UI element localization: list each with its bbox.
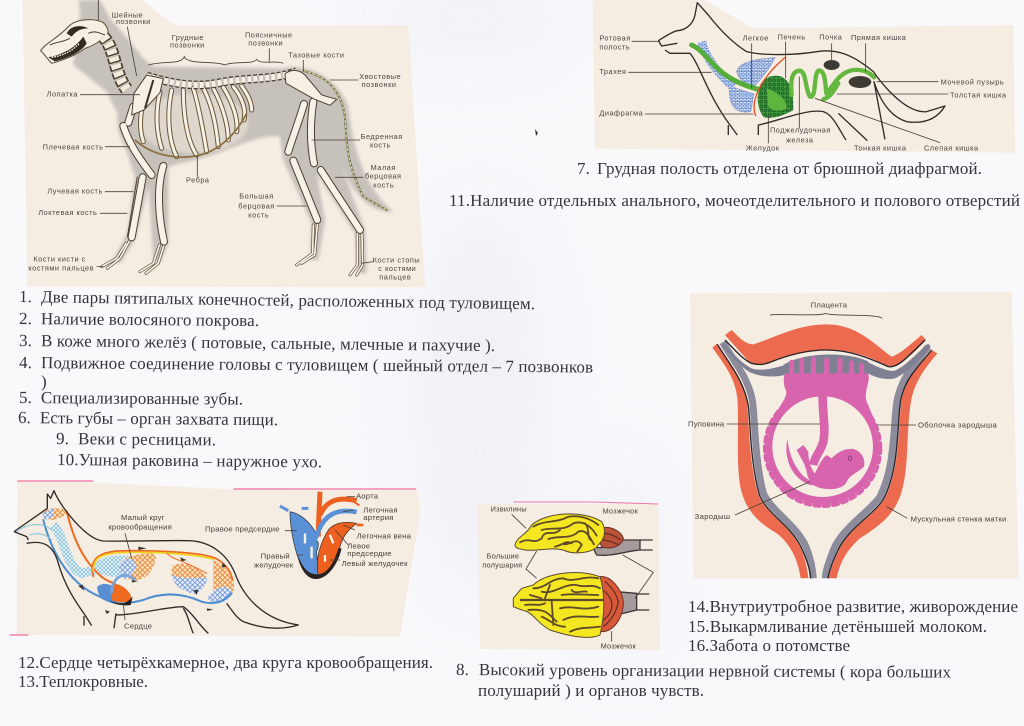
skeleton labels: Малая	[371, 163, 396, 172]
panel: digestive and respiratory system	[593, 0, 1015, 153]
clipping paper	[17, 482, 421, 637]
skeleton labels: кость	[370, 140, 391, 149]
circulation labels: Легочная	[363, 506, 398, 515]
blood vessels	[17, 512, 233, 603]
umbilical cord and embryo	[786, 395, 864, 489]
circulation labels: Левый желудочек	[342, 559, 408, 568]
speck	[535, 129, 538, 136]
text: points 1 to 6, 9, 10: 6. Есть губы – орган захвата пищи.	[18, 408, 278, 429]
digestive labels	[599, 32, 1007, 153]
panel: embryo in uterus	[688, 292, 1019, 578]
digestive labels: Печень	[778, 32, 806, 41]
skeleton labels: Лучевая кость	[47, 186, 103, 195]
leader lines	[80, 0, 373, 267]
brain labels: Мозжечок	[603, 506, 638, 515]
skeleton labels	[28, 10, 420, 281]
uterus muscle wall	[712, 324, 937, 578]
digestive tract	[692, 45, 874, 118]
embryo labels: Мускульная стенка матки	[911, 515, 1006, 524]
lungs	[729, 58, 775, 112]
body shadow	[73, 0, 393, 273]
digestive labels: Прямая кишка	[851, 33, 907, 42]
skeleton bones	[102, 37, 387, 275]
text: points 1 to 6, 9, 10: 9. Веки с ресницами.	[56, 429, 216, 449]
brain side view	[515, 514, 605, 553]
skeleton labels: позвонки	[362, 80, 396, 89]
cerebellum	[597, 527, 623, 632]
circulation labels: желудочек	[254, 560, 294, 569]
skeleton labels: берцовая	[365, 171, 402, 180]
neck capillary lattice	[53, 525, 95, 573]
leader lines	[628, 41, 948, 143]
clipping paper	[23, 0, 425, 287]
text: points 1 to 6, 9, 10: 10.Ушная раковина – наружное ухо.	[57, 450, 322, 471]
skeleton labels: позвонки	[170, 40, 205, 49]
skeleton labels: позвонки	[248, 38, 283, 47]
skeleton labels: Тазовые кости	[288, 50, 344, 59]
text: points 1 to 6, 9, 10	[18, 287, 593, 471]
digestive labels: железа	[786, 136, 814, 145]
circulation labels: предсердие	[347, 549, 392, 558]
digestive labels: Желудок	[746, 144, 780, 153]
brain labels: Извилины	[491, 505, 527, 514]
heart in body	[97, 575, 135, 605]
skeleton labels: кость	[248, 211, 269, 220]
digestive labels: Почка	[819, 32, 843, 41]
circulation labels: Правое предсердие	[205, 525, 280, 534]
skeleton labels: Кости стопы	[373, 255, 420, 264]
circulation labels: кровообращения	[108, 522, 172, 531]
skeleton labels: Локтевая кость	[38, 208, 97, 217]
skeleton labels: Шейные	[112, 10, 143, 19]
circulation labels: артерия	[363, 513, 394, 522]
skeleton labels: Грудные	[172, 33, 204, 42]
brain labels: Большие	[487, 551, 519, 560]
black wall lines	[717, 340, 932, 578]
text: points 7 and 11: 11.Наличие отдельных анального, мочеотделительного и полового отверстий	[449, 191, 1020, 210]
digestive labels: Толстая кишка	[950, 90, 1007, 99]
skeleton labels: позвонки	[116, 17, 151, 26]
skeleton labels: пальцев	[379, 272, 411, 281]
text: points 14 to 16	[688, 597, 1018, 655]
text: points 1 to 6, 9, 10: 3. В коже много желёз ( потовые, сальные, млечные и пахучие ).	[19, 331, 495, 355]
digestive labels: полость	[599, 42, 630, 51]
uterus grey lining	[723, 342, 928, 578]
leader lines	[512, 514, 653, 642]
clipping paper	[690, 292, 1019, 578]
digestive labels: Мочевой пузырь	[941, 78, 1004, 87]
text: points 14 to 16: 14.Внутриутробное развитие, живорождение	[688, 597, 1018, 616]
text: point 8: полушарий ) и органов чувств.	[478, 681, 704, 700]
brain labels: полушария	[482, 560, 522, 569]
skeleton labels: кость	[373, 180, 394, 189]
panel: dog skeleton	[23, 0, 425, 287]
text: points 7 and 11: 7. Грудная полость отделена от брюшной диафрагмой.	[577, 159, 982, 178]
skeleton labels: Хвостовые	[359, 72, 401, 81]
skeleton labels: Ребра	[186, 176, 210, 185]
skull	[41, 20, 108, 63]
clipping paper	[478, 504, 660, 650]
text: points 1 to 6, 9, 10: 1. Две пары пятипалых конечностей, расположенных под туловищем.	[19, 287, 535, 313]
digestive labels: Диафрагма	[599, 108, 644, 117]
embryo labels	[688, 300, 1006, 524]
skeleton labels: берцовая	[238, 201, 275, 210]
text: point 8: 8. Высокий уровень организации нервной системы ( кора больших	[456, 660, 952, 682]
fox outline	[14, 491, 298, 633]
pink paper edge	[513, 502, 658, 504]
circulation labels: Сердце	[124, 621, 152, 630]
skeleton labels: Кости кисти с	[33, 255, 86, 264]
skeleton labels: Поясничные	[245, 30, 293, 39]
digestive labels: Трахея	[599, 67, 626, 76]
text: points 1 to 6, 9, 10: 5. Специализированные зубы.	[19, 388, 243, 409]
pink paper edges	[10, 481, 416, 635]
text: points 12 and 13: 12.Сердце четырёхкамерное, два круга кровообращения.	[18, 653, 433, 672]
text: points 14 to 16: 15.Выкармливание детёнышей молоком.	[688, 617, 987, 636]
diaphragm	[754, 57, 785, 116]
text: points 12 and 13	[18, 653, 433, 691]
brain labels: Мозжечок	[601, 641, 636, 650]
fox outline	[658, 3, 945, 141]
large heart diagram	[280, 492, 363, 579]
leader lines	[727, 313, 916, 518]
circulation labels: Легочная вена	[357, 531, 412, 540]
skeleton labels: Большая	[239, 191, 274, 200]
capillary networks	[42, 508, 234, 603]
text: points 1 to 6, 9, 10: )	[41, 372, 47, 391]
text: point 8	[456, 660, 952, 700]
brain top view	[513, 573, 604, 637]
background scan shading	[370, 0, 660, 660]
skeleton labels: костями пальцев	[28, 264, 94, 273]
placenta grey lining	[722, 343, 931, 379]
circulation labels: Аорта	[356, 491, 379, 500]
rib cage highlight	[138, 93, 248, 153]
skeleton labels: Бедренная	[361, 132, 403, 141]
panel: circulatory system	[10, 481, 421, 637]
kidney and bladder	[824, 60, 871, 88]
amniotic cavity	[772, 396, 873, 497]
brain labels	[482, 505, 638, 650]
text: points 1 to 6, 9, 10: 4. Подвижное соединение головы с туловищем ( шейный отдел – 7 позвонков	[19, 353, 593, 377]
brain stems	[592, 540, 653, 615]
placenta and membrane	[765, 359, 880, 506]
circulation labels: Левое	[347, 541, 370, 550]
digestive labels: Ротовая	[599, 34, 631, 43]
digestive labels: Легкое	[743, 33, 769, 42]
circulation labels: Правый	[261, 551, 290, 560]
digestive labels: Тонкая кишка	[854, 143, 907, 152]
text: points 14 to 16: 16.Забота о потомстве	[688, 636, 850, 655]
text: points 12 and 13: 13.Теплокровные.	[18, 672, 148, 691]
skeleton labels: Плечевая кость	[43, 142, 103, 151]
circulation labels	[108, 491, 412, 630]
text: points 1 to 6, 9, 10: 2. Наличие волосяного покрова.	[19, 309, 259, 330]
digestive labels: Поджелудочная	[770, 126, 831, 135]
trachea lattice	[702, 42, 733, 87]
text: points 7 and 11	[449, 159, 1020, 210]
clipping paper	[593, 0, 1015, 153]
digestive labels: Слепая кишка	[924, 144, 979, 153]
skeleton labels: Лопатка	[47, 90, 78, 99]
skeleton labels: с костями	[378, 264, 416, 273]
embryo labels: Зародыш	[695, 512, 730, 521]
embryo labels: Плацента	[811, 300, 848, 309]
circulation arrows	[78, 547, 227, 614]
circulation labels: Малый круг	[121, 513, 165, 522]
panel: brain	[478, 502, 660, 650]
heart leader lines	[123, 497, 355, 620]
embryo labels: Оболочка зародыша	[918, 421, 998, 430]
embryo labels: Пуповина	[688, 419, 725, 428]
